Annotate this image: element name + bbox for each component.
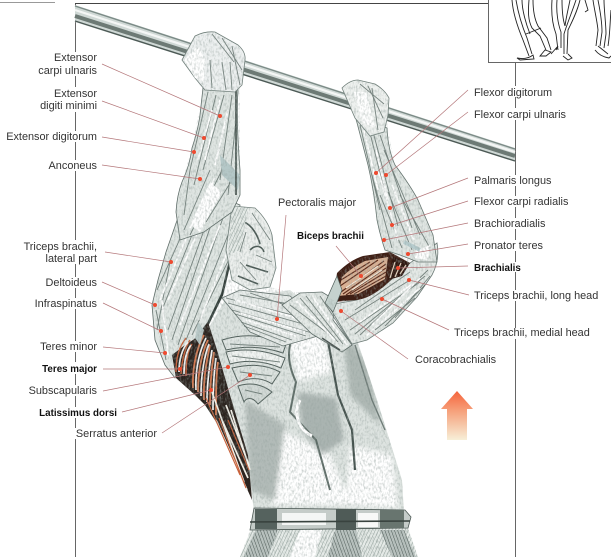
labels: left column: Latissimus dorsi <box>39 408 117 419</box>
labels: right column <box>415 87 598 366</box>
labels: centre <box>278 197 364 242</box>
pull-up bar <box>75 5 515 161</box>
shoulder and pec right <box>282 292 352 352</box>
arrow: upward movement <box>441 391 473 440</box>
belt <box>250 508 411 530</box>
labels: right column: Pronator teres <box>474 240 544 252</box>
labels: left column: Teres major <box>42 364 97 375</box>
labels: right column: Triceps brachii, medial head <box>454 327 590 339</box>
inset: mini body figures <box>488 0 611 62</box>
pointer lines with red dots <box>102 64 469 433</box>
right upper arm, triceps <box>328 243 438 344</box>
labels: left column: Infraspinatus <box>35 298 98 310</box>
illustration: man doing pull-up <box>75 5 515 557</box>
head <box>226 206 276 290</box>
labels: right column: Brachialis <box>474 263 521 274</box>
labels: right column: Flexor digitorum <box>474 87 552 99</box>
labels: left column: Extensor digitorum <box>6 131 97 143</box>
labels: left column: carpi ulnaris <box>38 65 98 77</box>
labels: right column: Triceps brachii, long head <box>474 290 598 302</box>
biceps brachii, highlighted <box>325 252 410 312</box>
labels: right column: Palmaris longus <box>474 175 552 187</box>
labels: left column <box>6 52 157 440</box>
right hand <box>342 80 389 136</box>
labels: left column: Extensor <box>54 88 97 100</box>
pencil grain over the figure <box>150 30 445 557</box>
pectoralis major <box>222 290 318 346</box>
labels: left column: Extensor <box>54 52 97 64</box>
left upper arm <box>152 190 240 378</box>
labels: left column: Anconeus <box>49 160 98 172</box>
labels: centre: Pectoralis major <box>278 197 356 209</box>
labels: left column: Subscapularis <box>29 385 98 397</box>
back muscle groups: teres and latissimus <box>172 322 252 500</box>
labels: centre: Biceps brachii <box>297 231 364 242</box>
labels: left column: Triceps brachii, <box>24 241 97 253</box>
shorts <box>240 528 418 557</box>
labels: right column: Brachioradialis <box>474 218 546 230</box>
labels: left column: lateral part <box>46 253 97 265</box>
labels: right column: Flexor carpi ulnaris <box>474 109 567 121</box>
right forearm <box>355 115 437 262</box>
labels: left column: Teres minor <box>40 341 97 353</box>
left hand <box>182 32 245 92</box>
labels: left column: digiti minimi <box>40 100 97 112</box>
torso <box>190 290 404 512</box>
labels: right column: Coracobrachialis <box>415 354 497 366</box>
left forearm <box>176 88 240 240</box>
labels: left column: Deltoideus <box>46 277 98 289</box>
labels: right column: Flexor carpi radialis <box>474 196 569 208</box>
serratus ribs <box>222 336 286 404</box>
labels: left column: Serratus anterior <box>76 428 157 440</box>
